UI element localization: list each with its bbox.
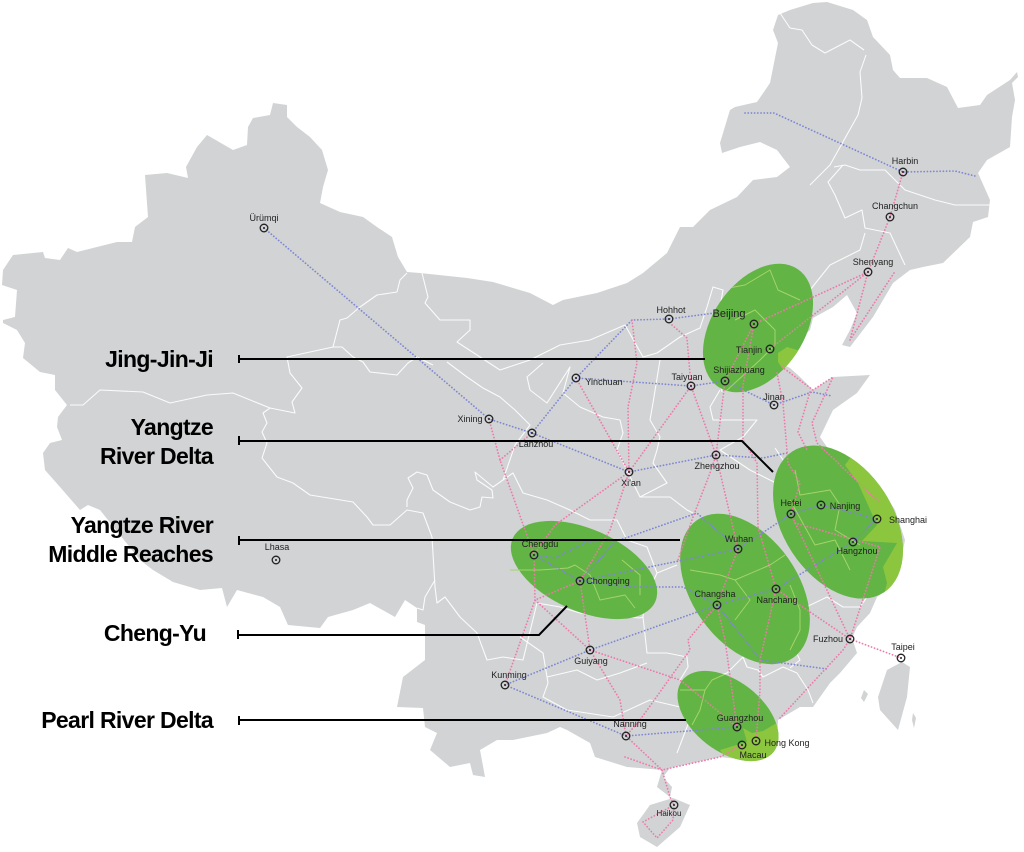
city markers and labels: Beijing bbox=[712, 308, 746, 320]
city markers and labels: Taiyuan bbox=[671, 372, 703, 382]
railway lines: pink bbox=[489, 172, 903, 838]
cluster: Yangtze River Middle Reaches green ellipse bbox=[653, 490, 837, 688]
leader line: Yangtze River Delta bbox=[239, 436, 773, 472]
cluster: Jing-Jin-Ji green ellipse bbox=[702, 264, 814, 392]
city markers and labels: Shijiazhuang bbox=[713, 365, 765, 375]
city markers and labels: Xining bbox=[457, 414, 483, 424]
city markers and labels: Wuhan bbox=[725, 534, 753, 544]
city markers and labels: Fuzhou bbox=[813, 634, 843, 644]
city markers and labels: Nanjing bbox=[830, 501, 860, 511]
city markers and labels: Haikou bbox=[657, 809, 681, 818]
city markers and labels: Guiyang bbox=[574, 656, 608, 666]
heading: Yangtze River Delta: River Delta bbox=[100, 443, 214, 469]
city markers and labels: Hangzhou bbox=[836, 546, 878, 556]
city markers and labels: Zhengzhou bbox=[694, 461, 740, 471]
city markers and labels: Chongqing bbox=[586, 576, 630, 586]
province borders bbox=[70, 13, 990, 753]
city markers and labels: Xi'an bbox=[621, 478, 641, 488]
city markers and labels: Tianjin bbox=[736, 345, 762, 355]
leader line: Jing-Jin-Ji bbox=[239, 355, 705, 363]
leader line: Cheng-Yu bbox=[238, 606, 567, 639]
cluster: Cheng-Yu green ellipse bbox=[496, 501, 672, 639]
city markers and labels: Changsha bbox=[694, 589, 736, 599]
city markers and labels: Hong Kong bbox=[764, 738, 810, 748]
city markers and labels: Hefei bbox=[780, 498, 802, 508]
city markers and labels: Hohhot bbox=[656, 305, 686, 315]
city markers and labels: Shanghai bbox=[889, 515, 927, 525]
city markers and labels: Taipei bbox=[891, 642, 915, 652]
heading: Cheng-Yu: Cheng-Yu bbox=[104, 620, 206, 646]
city markers and labels: Harbin bbox=[892, 156, 918, 166]
city markers and labels: Changchun bbox=[872, 201, 918, 211]
city markers and labels: Guangzhou bbox=[717, 713, 763, 723]
city markers and labels: Shenyang bbox=[853, 257, 893, 267]
heading: Yangtze River Middle Reaches: Yangtze River bbox=[71, 512, 214, 538]
heading: Pearl River Delta: Pearl River Delta bbox=[41, 707, 214, 733]
city markers and labels: Jinan bbox=[763, 392, 785, 402]
leader line: Yangtze River Middle Reaches bbox=[239, 536, 680, 545]
heading: Jing-Jin-Ji: Jing-Jin-Ji bbox=[105, 346, 213, 372]
city markers and labels: Nanchang bbox=[756, 595, 798, 605]
leader line: Pearl River Delta bbox=[239, 716, 686, 725]
city markers and labels: Lhasa bbox=[265, 542, 289, 552]
heading: Yangtze River Middle Reaches: Middle Reaches bbox=[48, 541, 213, 567]
city markers and labels: Ürümqi bbox=[249, 213, 279, 223]
cluster: Yangtze River Delta green ellipse bbox=[773, 446, 903, 598]
city markers and labels: Macau bbox=[739, 750, 767, 760]
city markers and labels bbox=[249, 156, 927, 818]
city markers and labels: Chengdu bbox=[522, 539, 558, 549]
city markers and labels: Yinchuan bbox=[585, 377, 623, 387]
city markers and labels: Nanning bbox=[613, 719, 647, 729]
heading: Yangtze River Delta: Yangtze bbox=[131, 414, 213, 440]
city markers and labels: Lanzhou bbox=[519, 439, 553, 449]
city markers and labels: Kunming bbox=[491, 670, 527, 680]
cluster: Pearl River Delta green ellipse bbox=[677, 670, 779, 762]
railway lines: blue bbox=[264, 113, 975, 736]
